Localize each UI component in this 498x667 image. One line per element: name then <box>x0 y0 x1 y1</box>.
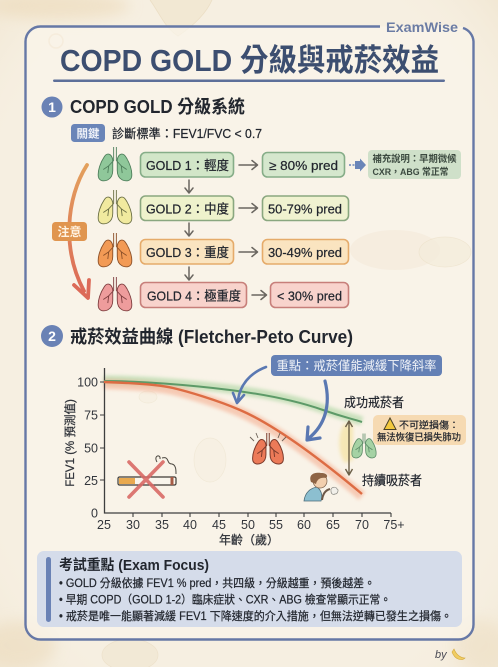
supplementary note <box>349 150 461 179</box>
x-axis labels: 45 <box>212 518 226 532</box>
supplementary note: 補充說明：早期微候 <box>372 153 457 165</box>
y-axis labels: 100 <box>77 376 98 390</box>
stage: GOLD 3: 30-49% pred <box>268 245 342 260</box>
y-axis labels: 25 <box>84 474 98 488</box>
supplementary note: CXR，ABG 常正常 <box>372 166 448 178</box>
callout: irreversible damage <box>373 415 466 445</box>
line chart: Fletcher-Peto curve <box>63 368 405 547</box>
signature: by banana: by <box>435 649 448 661</box>
panel heading: 考試重點 (Exam Focus) <box>59 556 209 574</box>
x-axis labels: 40 <box>183 518 197 532</box>
brand: ExamWise: ExamWise <box>386 20 459 35</box>
title: COPD GOLD 分級與戒菸效益 <box>60 43 439 78</box>
curve washes <box>104 380 362 496</box>
icon: coughing man <box>304 473 338 501</box>
stage: GOLD 4 <box>140 282 348 308</box>
bullet 3: • 戒菸是唯一能顯著減緩 FEV1 下降速度的介入措施，但無法逆轉已發生之損傷。 <box>59 609 452 623</box>
arrow: callout to curve, right <box>307 381 327 440</box>
lungs icon: GOLD 3 <box>98 233 132 267</box>
accent bar <box>46 557 51 622</box>
key criteria <box>71 124 262 142</box>
x-axis labels: 50 <box>241 518 255 532</box>
arrow: callout to curve, left <box>233 367 266 403</box>
bullet 1: • GOLD 分級依據 FEV1 % pred，共四級，分級越重，預後越差。 <box>59 576 375 590</box>
stage: GOLD 2 <box>140 196 348 220</box>
x-axis labels: 60 <box>297 518 311 532</box>
section 1 heading: COPD GOLD 分級系統 <box>70 96 245 117</box>
x-axis labels: 55 <box>269 518 283 532</box>
x-axis labels: 70 <box>355 518 369 532</box>
y-axis labels: 75 <box>84 408 98 422</box>
lungs icon: GOLD 4 <box>98 277 132 311</box>
stage: GOLD 2: GOLD 2：中度 <box>146 202 229 216</box>
stage: GOLD 2: 50-79% pred <box>268 202 342 216</box>
stage: GOLD 3: GOLD 3：重度 <box>146 245 229 260</box>
icon: crossed-out cigarette <box>118 456 176 497</box>
stage: GOLD 4: GOLD 4：極重度 <box>147 288 241 304</box>
warning arrow: 注意 <box>57 224 82 239</box>
stage: GOLD 1: GOLD 1：輕度 <box>146 158 229 173</box>
signature: by banana <box>435 649 465 661</box>
y-axis labels <box>77 376 98 520</box>
bullet 2: • 早期 COPD（GOLD 1-2）臨床症狀、CXR、ABG 檢查常顯示正常。 <box>59 592 391 606</box>
orange curve: continued smoking <box>104 382 362 494</box>
key criteria: 診斷標準：FEV1/FVC < 0.7 <box>112 126 262 141</box>
y-axis title: FEV1 (% 預測值) <box>63 399 77 487</box>
y-axis labels: 0 <box>91 506 98 520</box>
green curve: quit smoking <box>104 381 362 422</box>
y-axis labels: 50 <box>84 442 98 456</box>
double arrow: lung function gap <box>346 421 352 475</box>
section 2 heading: 戒菸效益曲線 (Fletcher-Peto Curve) <box>70 327 353 347</box>
x-axis labels: 65 <box>326 518 340 532</box>
stage: GOLD 3 <box>140 240 348 264</box>
callout: irreversible damage: 無法恢復已損失肺功 <box>377 432 461 444</box>
x-axis labels: 30 <box>126 518 140 532</box>
stage: GOLD 1 <box>140 152 344 177</box>
x-axis labels: 25 <box>97 518 111 532</box>
section 1 heading: 1 <box>48 99 56 115</box>
lungs icon: red with pain marks <box>250 433 286 464</box>
down arrow 3 <box>185 267 193 280</box>
exam focus panel <box>37 551 462 627</box>
lungs icon: GOLD 2 <box>98 190 132 224</box>
stage: GOLD 4: < 30% pred <box>277 288 342 304</box>
key criteria: 關鍵 <box>76 126 100 140</box>
x-axis title: 年齡（歲） <box>219 533 279 547</box>
x-axis labels: 75+ <box>383 518 405 532</box>
section 2 heading: 2 <box>48 328 56 344</box>
callout: key point: 重點：戒菸僅能減緩下降斜率 <box>276 358 436 373</box>
lungs icon: GOLD 1 <box>98 147 132 181</box>
stage: GOLD 1: ≥ 80% pred <box>269 158 338 173</box>
callout: irreversible damage: 不可逆損傷： <box>399 420 459 432</box>
down arrow 2 <box>185 223 193 236</box>
warning arrow <box>52 165 89 298</box>
lungs icon: green small <box>352 434 376 458</box>
label: continued smokers: 持續吸菸者 <box>362 473 422 488</box>
down arrow 1 <box>185 180 193 193</box>
axes <box>100 368 391 517</box>
x-axis labels: 35 <box>155 518 169 532</box>
x-axis labels <box>97 518 405 532</box>
callout: key point <box>271 355 442 376</box>
label: quit smokers: 成功戒菸者 <box>344 395 404 410</box>
